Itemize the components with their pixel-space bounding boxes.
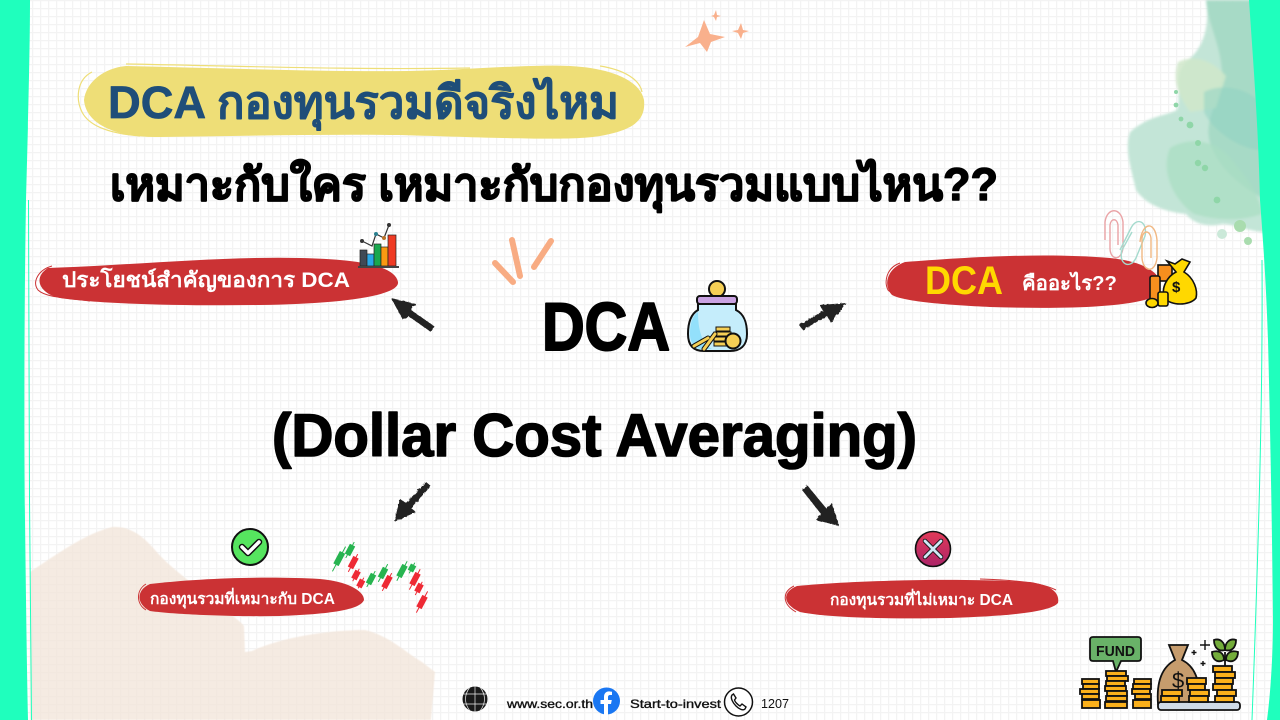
- hotline number: 1207: [761, 696, 789, 711]
- title line 2: เหมาะกับใคร เหมาะกับกองทุนรวมแบบไหน??: [110, 158, 998, 213]
- label: key benefits of DCA: [36, 258, 398, 305]
- panel: left teal border: [0, 0, 32, 720]
- facebook page text: Start-to-invest: [630, 697, 722, 711]
- icon: globe www: [462, 686, 488, 712]
- icon: orange burst strokes: [495, 240, 551, 282]
- label: suitable funds: กองทุนรวมที่เหมาะกับ DCA: [150, 587, 335, 609]
- arrow: to bottom-left: [394, 482, 431, 522]
- FUND sign: FUND: [1096, 643, 1135, 660]
- icon: facebook: [593, 688, 620, 715]
- central heading: DCA: DCA: [542, 289, 670, 365]
- icon: bar chart: [358, 223, 399, 268]
- arrow: to top-right: [799, 303, 846, 330]
- website text: www.sec.or.th: [506, 697, 593, 711]
- panel: green watercolor splash top-right: [1128, 0, 1265, 245]
- icon: money bag with coins: $: [1172, 279, 1181, 296]
- label: unsuitable funds: [785, 579, 1058, 618]
- icon: phone: [724, 688, 752, 716]
- label: unsuitable funds: กองทุนรวมที่ไม่เหมาะ DCA: [830, 588, 1013, 610]
- label: key benefits of DCA: ประโยชน์สำคัญของการ DCA: [62, 267, 350, 293]
- icon: money bag with plant: [1158, 639, 1240, 710]
- title line 1: DCA กองทุนรวมดีจริงไหม: [108, 76, 619, 131]
- label: suitable funds: [138, 578, 364, 616]
- DCA yellow word: DCA: [925, 259, 1003, 303]
- panel: right teal border: [1249, 0, 1280, 720]
- panel: beige paint blotch bottom-left: [30, 527, 435, 720]
- arrow: to bottom-right: [802, 485, 839, 526]
- icon: candlestick chart: [330, 541, 430, 614]
- icon: money bag with coins: [1146, 259, 1196, 308]
- label: what is DCA: [886, 255, 1160, 308]
- icon: orange sparkles: [685, 10, 749, 52]
- icon: coin jar: [688, 281, 747, 351]
- icon: red cross: [916, 532, 950, 566]
- heading highlight: [78, 64, 644, 139]
- question text: คืออะไร??: [1022, 271, 1117, 295]
- icon: fund coin stacks: [1080, 637, 1151, 708]
- arrow: to top-left: [391, 298, 434, 332]
- icon: money bag with plant: $: [1172, 668, 1184, 693]
- footer: contact row: [462, 686, 789, 716]
- icon: paper clips: [1105, 211, 1157, 269]
- central subheading: Dollar Cost Averaging: (Dollar Cost Averaging): [272, 402, 917, 469]
- icon: green check: [232, 529, 268, 565]
